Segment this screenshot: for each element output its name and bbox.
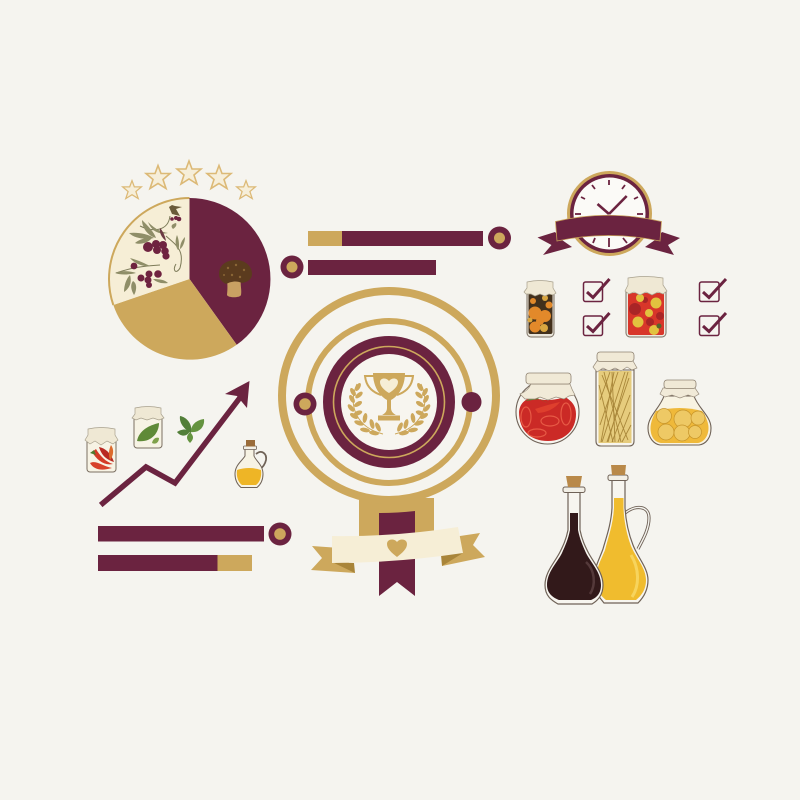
bottle: balsamic vinegar (545, 476, 603, 604)
jar: red and yellow vegetables (625, 276, 667, 337)
icon: mushroom (219, 260, 252, 297)
jar: chili peppers (85, 428, 118, 472)
ribbon tail: left (538, 232, 572, 255)
bottle: olive oil jug (594, 465, 649, 603)
checkbox 3 (700, 279, 726, 302)
middle gold ring (308, 321, 470, 483)
maroon ring (332, 345, 446, 459)
laurel: right (395, 382, 432, 436)
banner: cream (332, 527, 463, 563)
checkbox 4 (700, 313, 726, 336)
left ring marker (294, 392, 316, 416)
icon: basil leaves (177, 416, 204, 443)
pie slice: maroon (190, 198, 270, 345)
icon: heart (387, 540, 407, 557)
jar: red peppers (516, 373, 579, 444)
clock with ribbon (538, 171, 680, 256)
icon: trophy (365, 373, 413, 420)
ring marker: second bar (280, 256, 304, 278)
jar: dark pickles with orange (524, 280, 556, 337)
checkbox 2 (584, 313, 610, 336)
ring marker: lower bar (268, 522, 292, 546)
progress bar: bottom maroon and gold (98, 555, 252, 571)
pie slice: gold (113, 279, 237, 360)
ring marker: top bar (488, 226, 511, 250)
bottle: small oil jug (235, 440, 266, 488)
jar: lemons (648, 380, 711, 445)
ribbon stem: gold (359, 498, 434, 540)
banner tail: left (311, 546, 355, 573)
progress bar: lower maroon (98, 526, 264, 542)
growth arrow (101, 381, 250, 505)
progress bar: top gold and maroon (308, 231, 483, 246)
clock face (567, 171, 652, 256)
pie chart (109, 198, 270, 360)
right dot marker (462, 392, 482, 412)
pie slice: cream with olive branches (109, 198, 190, 305)
checkbox 1 (584, 279, 610, 302)
inner thin gold ring (334, 346, 444, 458)
ribbon tail: maroon (379, 511, 415, 596)
outer gold ring (282, 291, 496, 500)
progress bar: second maroon (308, 260, 436, 275)
banner tail: right (442, 533, 485, 566)
ribbon band (556, 215, 662, 241)
jar: basil (132, 406, 164, 448)
laurel: left (346, 382, 383, 436)
ribbon tail: right (645, 232, 680, 255)
rating stars (123, 161, 255, 199)
banner fold shadows (332, 553, 463, 573)
medal (282, 291, 496, 596)
jar: pasta (593, 352, 637, 446)
